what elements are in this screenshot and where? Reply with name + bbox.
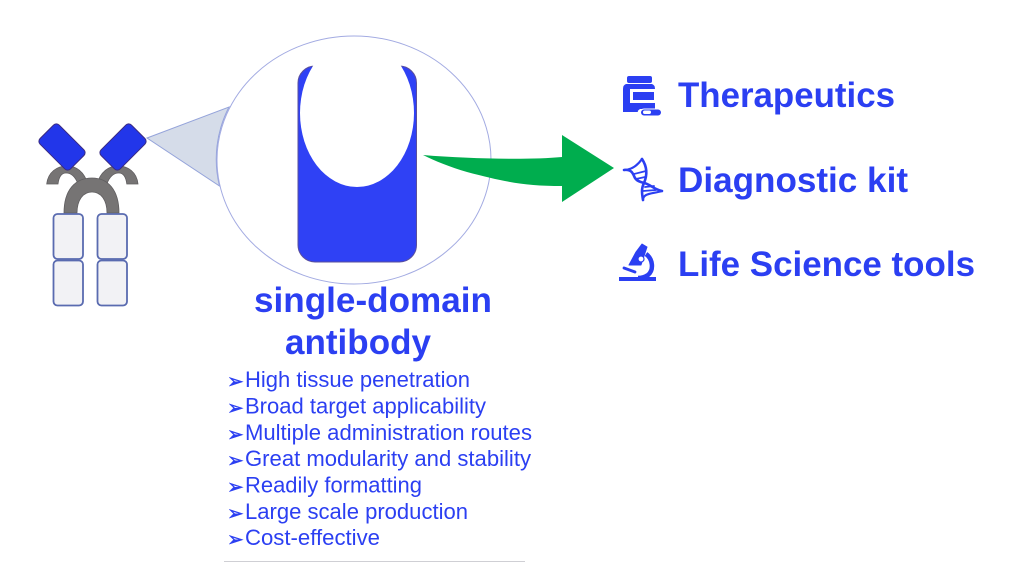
label: Diagnostic kit: Diagnostic kit: [678, 161, 908, 200]
heading: single-domain antibody: [254, 281, 492, 362]
heading: single-domain antibody: single-domain: [254, 281, 492, 320]
list: antibody properties: Cost-effective: [245, 525, 380, 550]
list: antibody properties: Readily formatting: [245, 472, 422, 498]
list: antibody properties: Large scale production: [245, 499, 468, 524]
list: antibody properties: ➢: [227, 396, 244, 420]
icon: single-domain antibody: [298, 39, 416, 262]
list: antibody properties: ➢: [227, 422, 244, 446]
arrow: green curved arrow: [423, 135, 614, 202]
list: antibody properties: ➢: [227, 501, 244, 525]
list: antibody properties: High tissue penetration: [245, 367, 470, 392]
list: antibody properties: [227, 367, 532, 551]
list: antibody properties: ➢: [227, 448, 244, 472]
list: antibody properties: Broad target applicability: [245, 394, 486, 418]
icon: full antibody: [37, 122, 148, 306]
antibody variable domains: [37, 122, 148, 172]
zoom circle outline: [217, 36, 491, 284]
list: antibody properties: Multiple administration routes: [245, 420, 532, 445]
list: antibody properties: Great modularity and stability: [245, 446, 531, 471]
list: antibody properties: ➢: [227, 474, 244, 498]
list: antibody properties: ➢: [227, 369, 244, 393]
icon: microscope: [619, 244, 656, 281]
list: antibody properties: ➢: [227, 527, 244, 551]
antibody heavy chain boxes: [54, 214, 127, 306]
icon: DNA helix: [624, 159, 662, 200]
label: Life Science tools: Life Science tools: [678, 245, 975, 284]
heading: single-domain antibody: antibody: [285, 323, 432, 362]
zoom cone from antibody tip to circle: [147, 107, 229, 186]
label: Therapeutics: Therapeutics: [678, 76, 895, 115]
icon: medicine bottle: [623, 76, 662, 116]
antibody hinge arcs: [47, 166, 138, 213]
